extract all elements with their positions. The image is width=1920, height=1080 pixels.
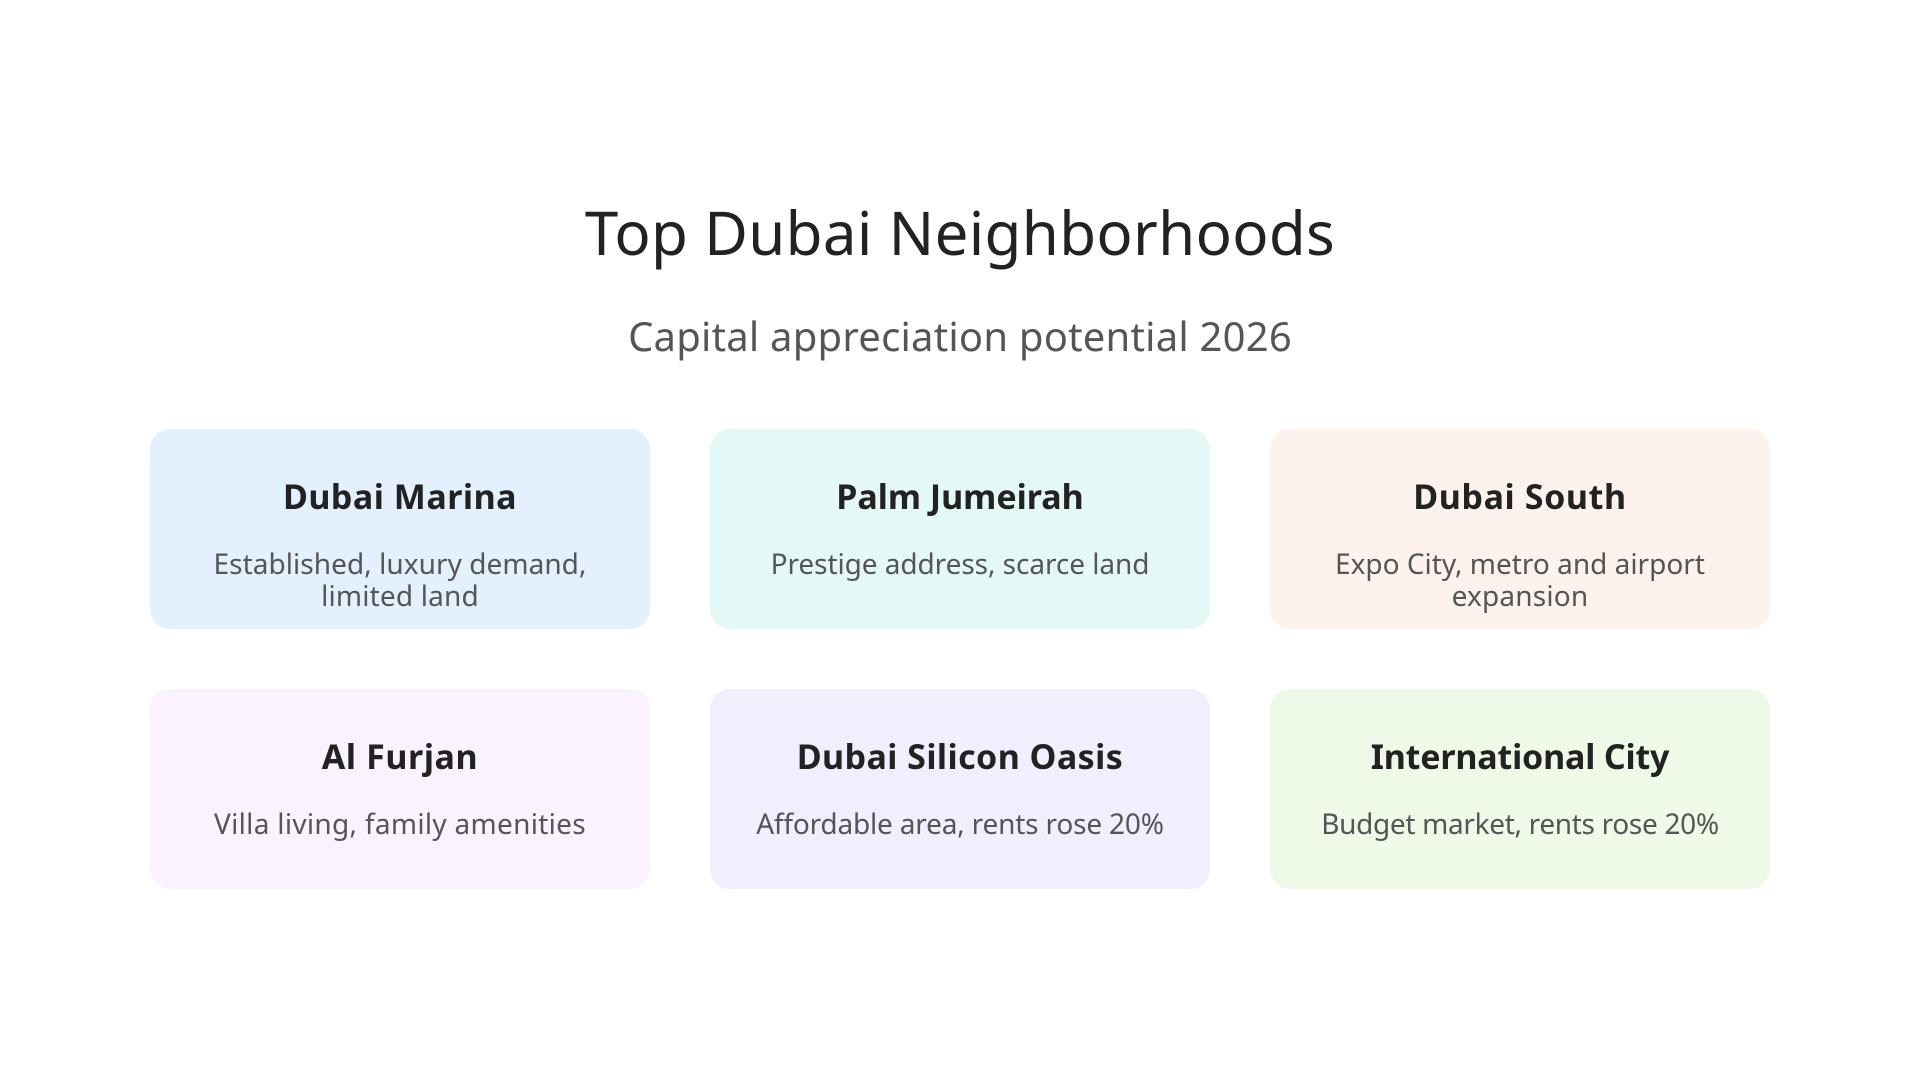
card: Al Furjan	[150, 689, 650, 889]
card: Dubai Marina	[150, 429, 650, 629]
subtitle: Capital appreciation potential 2026	[628, 308, 1292, 363]
card text: limited land	[321, 577, 479, 615]
card text: expansion	[1452, 577, 1588, 615]
card heading: Dubai Marina	[283, 473, 517, 519]
card text: Villa living, family amenities	[214, 805, 586, 843]
card heading: Al Furjan	[322, 733, 478, 779]
card text: Affordable area, rents rose 20%	[756, 805, 1164, 843]
card: Dubai Silicon Oasis	[710, 689, 1210, 889]
card heading: International City	[1371, 733, 1669, 779]
card: Dubai South	[1270, 429, 1770, 629]
card text: Budget market, rents rose 20%	[1321, 805, 1719, 843]
card heading: Palm Jumeirah	[836, 473, 1084, 519]
card text	[213, 545, 587, 615]
card: International City	[1270, 689, 1770, 889]
card text: Established, luxury demand,	[213, 545, 587, 583]
card text: Prestige address, scarce land	[771, 545, 1149, 583]
card text: Expo City, metro and airport	[1335, 545, 1705, 583]
card: Palm Jumeirah	[710, 429, 1210, 629]
card heading: Dubai Silicon Oasis	[797, 733, 1123, 779]
card text	[1335, 545, 1705, 615]
card heading: Dubai South	[1413, 473, 1627, 519]
title: Top Dubai Neighborhoods	[585, 191, 1335, 273]
